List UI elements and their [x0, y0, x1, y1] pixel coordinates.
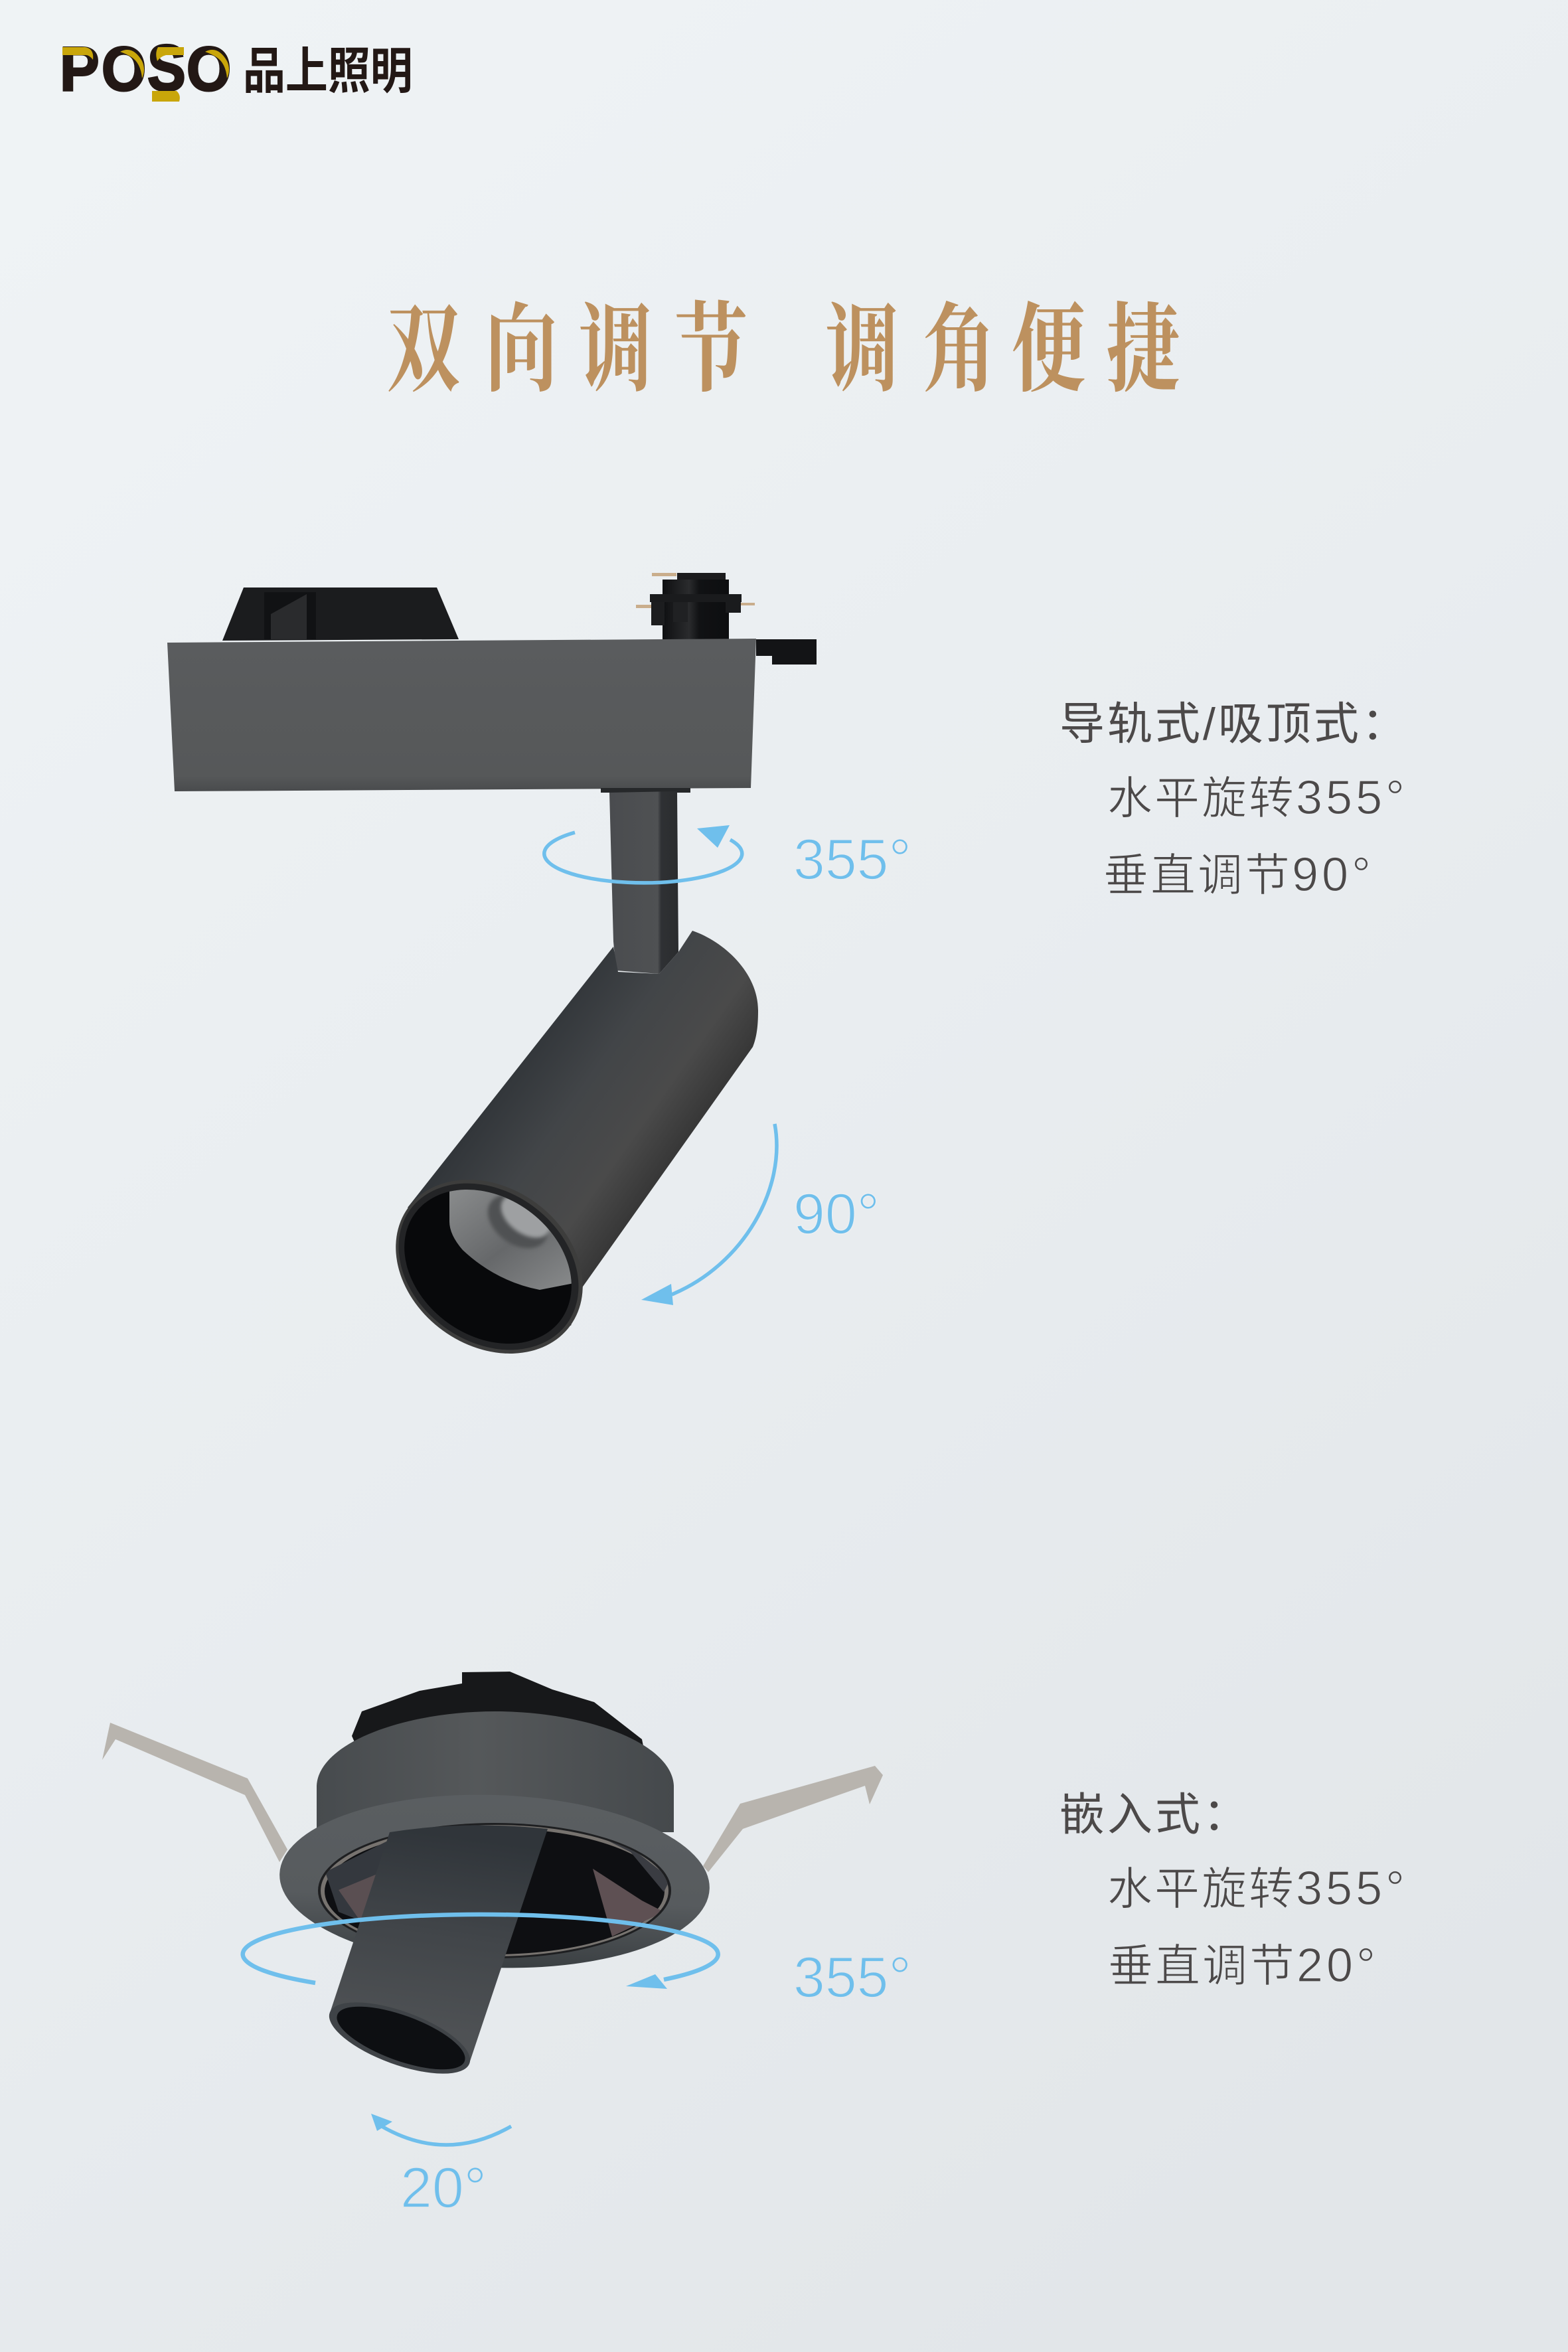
- adjustable inner tube: [321, 1826, 548, 2088]
- front opening with lens: [396, 1182, 583, 1354]
- spec text: recessed: [1059, 1790, 1408, 1992]
- logo gold accents: [62, 47, 229, 102]
- label 20 degrees: 20°: [400, 2156, 487, 2220]
- head box: [167, 639, 756, 791]
- cylinder body: [408, 931, 758, 1326]
- tilt arrow 90: [641, 1124, 777, 1305]
- rotation arrow 355: [544, 825, 742, 883]
- track light product: [167, 573, 817, 1389]
- left spring clip: [102, 1723, 287, 1862]
- logo wordmark POSO: P: [60, 35, 100, 104]
- connector post: [636, 573, 755, 639]
- title: 双向调节调角便捷: [387, 272, 1180, 412]
- right spring clip: [703, 1766, 883, 1872]
- spec vertical adjustment: 垂直调节20°: [1108, 1939, 1379, 1992]
- label 355 degrees recessed: 355°: [793, 1946, 911, 2009]
- logo wordmark POSO: O: [102, 35, 146, 104]
- spec text: track/surface mounted: [1059, 699, 1409, 902]
- spec vertical adjustment: 垂直调节90°: [1103, 848, 1374, 902]
- reflector opening: [318, 1823, 671, 1958]
- logo wordmark POSO: O: [187, 35, 231, 104]
- tilt arrow 20: [371, 2114, 511, 2145]
- rear driver housing: [352, 1672, 645, 1753]
- track adapter base: [222, 588, 459, 641]
- locking tab: [756, 639, 817, 665]
- logo wordmark POSO: [60, 31, 231, 104]
- recessed light product: [102, 1672, 883, 2145]
- logo Chinese name: 品上照明: [243, 43, 413, 99]
- stem: [601, 788, 690, 974]
- logo wordmark POSO: S: [147, 31, 186, 104]
- spec heading: 导轨式/吸顶式：: [1059, 699, 1409, 749]
- rotation arrow 355: [243, 1915, 718, 1989]
- cylinder housing: [317, 1711, 674, 1832]
- spec horizontal rotation: 水平旋转355°: [1107, 771, 1408, 824]
- label 90 degrees: 90°: [793, 1182, 880, 1246]
- spec heading: 嵌入式：: [1059, 1790, 1251, 1840]
- logo: POSO 品上照明: [60, 31, 413, 104]
- flange ring: [277, 1788, 712, 1975]
- label 355 degrees track: 355°: [793, 828, 911, 892]
- spec horizontal rotation: 水平旋转355°: [1107, 1862, 1408, 1915]
